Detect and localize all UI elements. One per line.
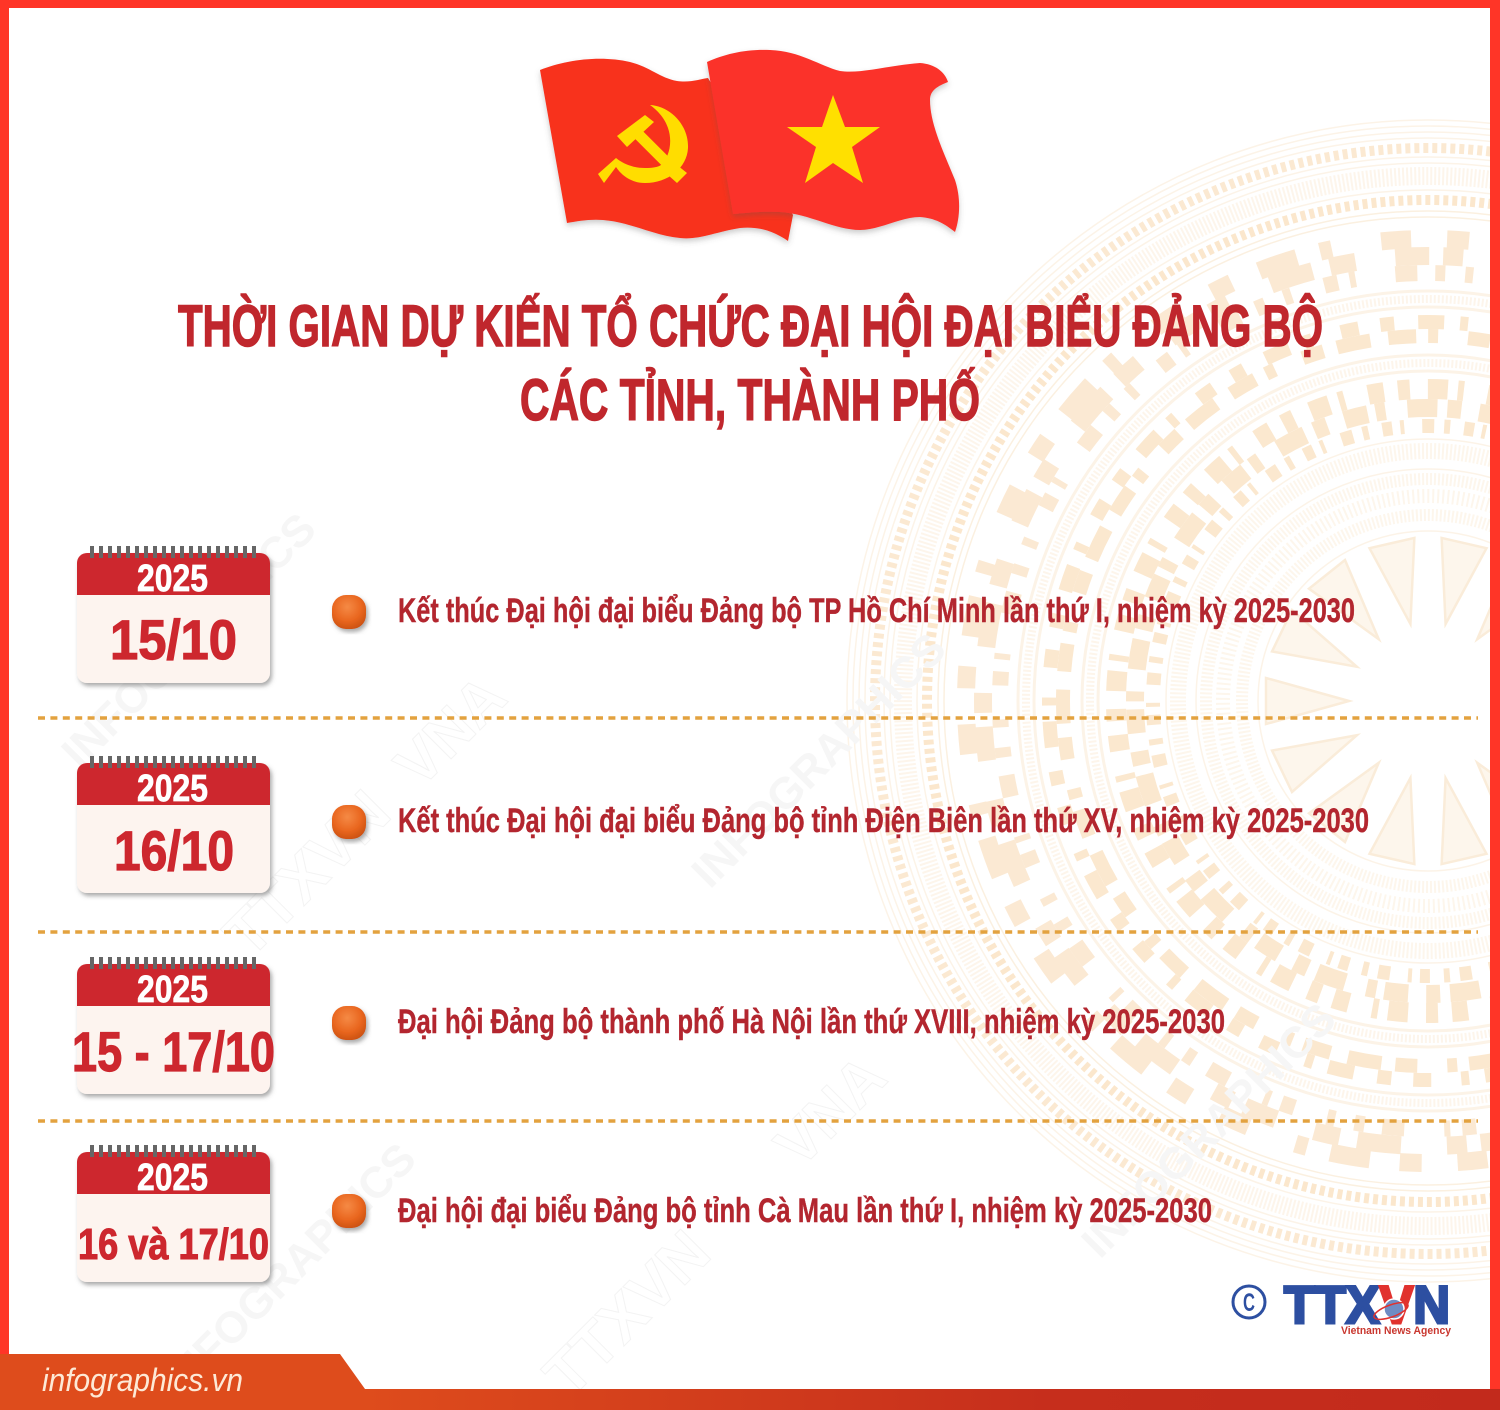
row 2: 16/10 <box>77 762 1369 893</box>
event text: Đại hội đại biểu Đảng bộ tỉnh Cà Mau lần thứ I, nhiệm kỳ 2025-2030 <box>398 1192 1212 1230</box>
calendar: 16 và 17/10 <box>77 1151 270 1282</box>
event text: Đại hội Đảng bộ thành phố Hà Nội lần thứ XVIII, nhiệm kỳ 2025-2030 <box>398 1003 1225 1041</box>
bullet <box>332 1194 366 1228</box>
faint agency watermarks: INFOGRAPHICS <box>152 1134 426 1407</box>
bronze drum background pattern <box>847 120 1500 1282</box>
calendar: 15/10: 15/10 <box>110 608 237 671</box>
logo: TTXVN Vietnam News Agency <box>1233 1276 1452 1337</box>
faint agency watermarks: TTXVN <box>531 1217 724 1410</box>
icon: national flag with yellow star <box>707 50 959 232</box>
title: CÁC TỈNH, THÀNH PHỐ <box>520 368 980 433</box>
icon: party flag with hammer and sickle <box>540 59 793 241</box>
calendar: 16 và 17/10: 2025 <box>137 1157 208 1199</box>
faint agency watermarks: VNA <box>762 1042 899 1179</box>
icon: copyright mark <box>1233 1286 1265 1318</box>
calendar: 16/10: 16/10 <box>114 819 234 882</box>
row 1: 15/10 <box>77 552 1355 683</box>
faint agency watermarks: VNA <box>382 662 519 799</box>
footer site name: infographics.vn <box>42 1362 243 1398</box>
calendar: 15/10 <box>77 552 270 683</box>
calendar: 16 và 17/10: 16 và 17/10 <box>78 1220 269 1269</box>
faint agency watermarks <box>52 504 1346 1410</box>
calendar: 15 - 17/10: 15 - 17/10 <box>72 1020 275 1083</box>
icon: party flag and national flag <box>540 50 959 241</box>
bullet <box>332 595 366 629</box>
footer bar <box>0 1354 1500 1410</box>
faint agency watermarks: INFOGRAPHICS <box>1072 994 1346 1267</box>
calendar: 15 - 17/10 <box>72 963 275 1094</box>
faint agency watermarks: TTXVN <box>211 777 404 970</box>
footer tab <box>0 1354 365 1410</box>
logo wordmark: TTXVN <box>1284 1276 1450 1335</box>
faint agency watermarks: INFOGRAPHICS <box>682 624 956 897</box>
logo tagline: Vietnam News Agency <box>1341 1325 1452 1337</box>
logo globe <box>1372 1299 1410 1323</box>
row 4: 16 và 17/10 <box>77 1151 1212 1282</box>
bullet <box>332 805 366 839</box>
faint agency watermarks: INFOGRAPHICS <box>52 504 326 777</box>
row 3: 15 - 17/10 <box>72 963 1225 1094</box>
bullet <box>332 1006 366 1040</box>
calendar: 16/10 <box>77 762 270 893</box>
calendar: 16/10: 2025 <box>137 768 208 810</box>
title <box>178 294 1323 433</box>
calendar: 15 - 17/10: 2025 <box>137 969 208 1011</box>
calendar: 15/10: 2025 <box>137 558 208 600</box>
icon: copyright mark: C <box>1243 1289 1255 1317</box>
